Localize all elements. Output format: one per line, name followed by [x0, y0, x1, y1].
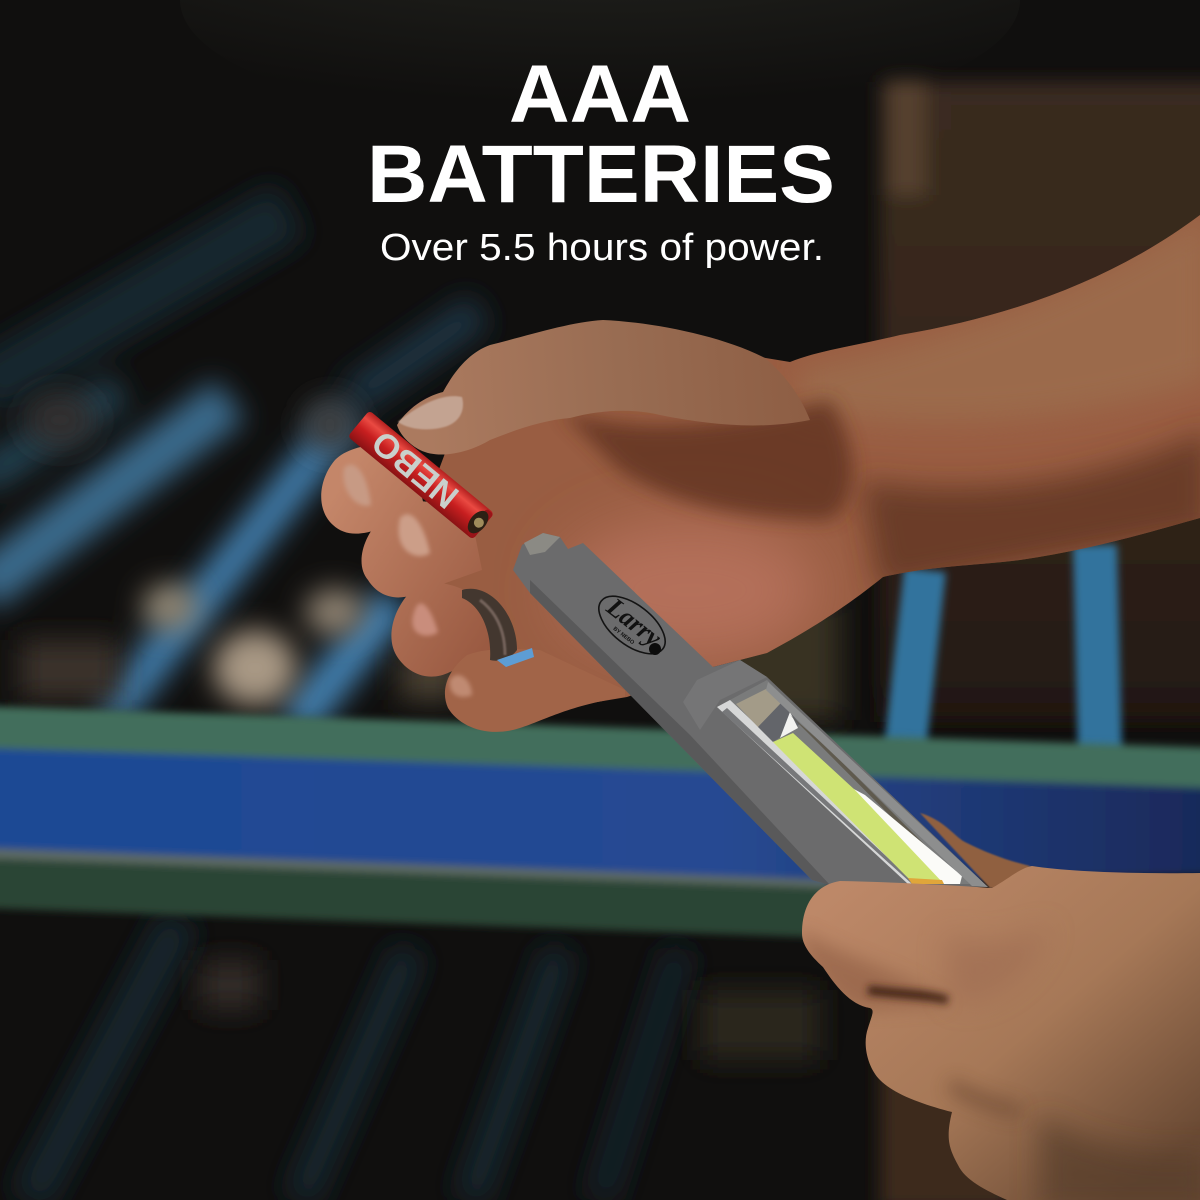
logo: Larry by Nebo [589, 585, 675, 665]
upper hand: palm and forearm [440, 215, 1200, 702]
green shelf and blue label band [0, 706, 1200, 938]
logo: Larry by Nebo: Larry [601, 592, 667, 653]
pinky finger [445, 649, 625, 732]
subtitle: Over 5.5 hours of power. [380, 227, 824, 269]
flashlight shaded edge [530, 580, 830, 885]
flashlight [513, 533, 988, 887]
thumbnail [398, 396, 463, 429]
red AAA battery [347, 408, 497, 541]
logo: Larry by Nebo: BY NEBO [612, 626, 636, 647]
title [367, 49, 835, 220]
white strip beside COB [852, 788, 962, 884]
red AAA battery: NEBO [365, 423, 466, 516]
forearm lower shadow [860, 430, 1200, 590]
palm shadow under thumb [560, 400, 852, 520]
lower hand holding flashlight [790, 813, 1200, 1200]
title: AAA [509, 49, 691, 140]
blue uprights at right [905, 545, 1100, 755]
lens window [717, 680, 970, 884]
fingertip behind flashlight [920, 813, 1030, 890]
index finger [321, 444, 425, 534]
fingers [321, 444, 625, 732]
blurred beige boxes [20, 392, 840, 1060]
blurred blue shelf stripes [0, 210, 680, 1200]
middle finger [362, 501, 482, 597]
flashlight body [513, 533, 988, 887]
yellow COB light [773, 733, 944, 884]
thumb and hand [790, 860, 1200, 1200]
back of forearm highlight [800, 210, 1200, 422]
ring finger [391, 583, 505, 677]
thumb over battery [397, 320, 810, 455]
palm highlight [560, 520, 820, 660]
icon: ring on finger [462, 589, 534, 667]
brown wall at right [880, 80, 1200, 1200]
title: BATTERIES [367, 129, 835, 220]
